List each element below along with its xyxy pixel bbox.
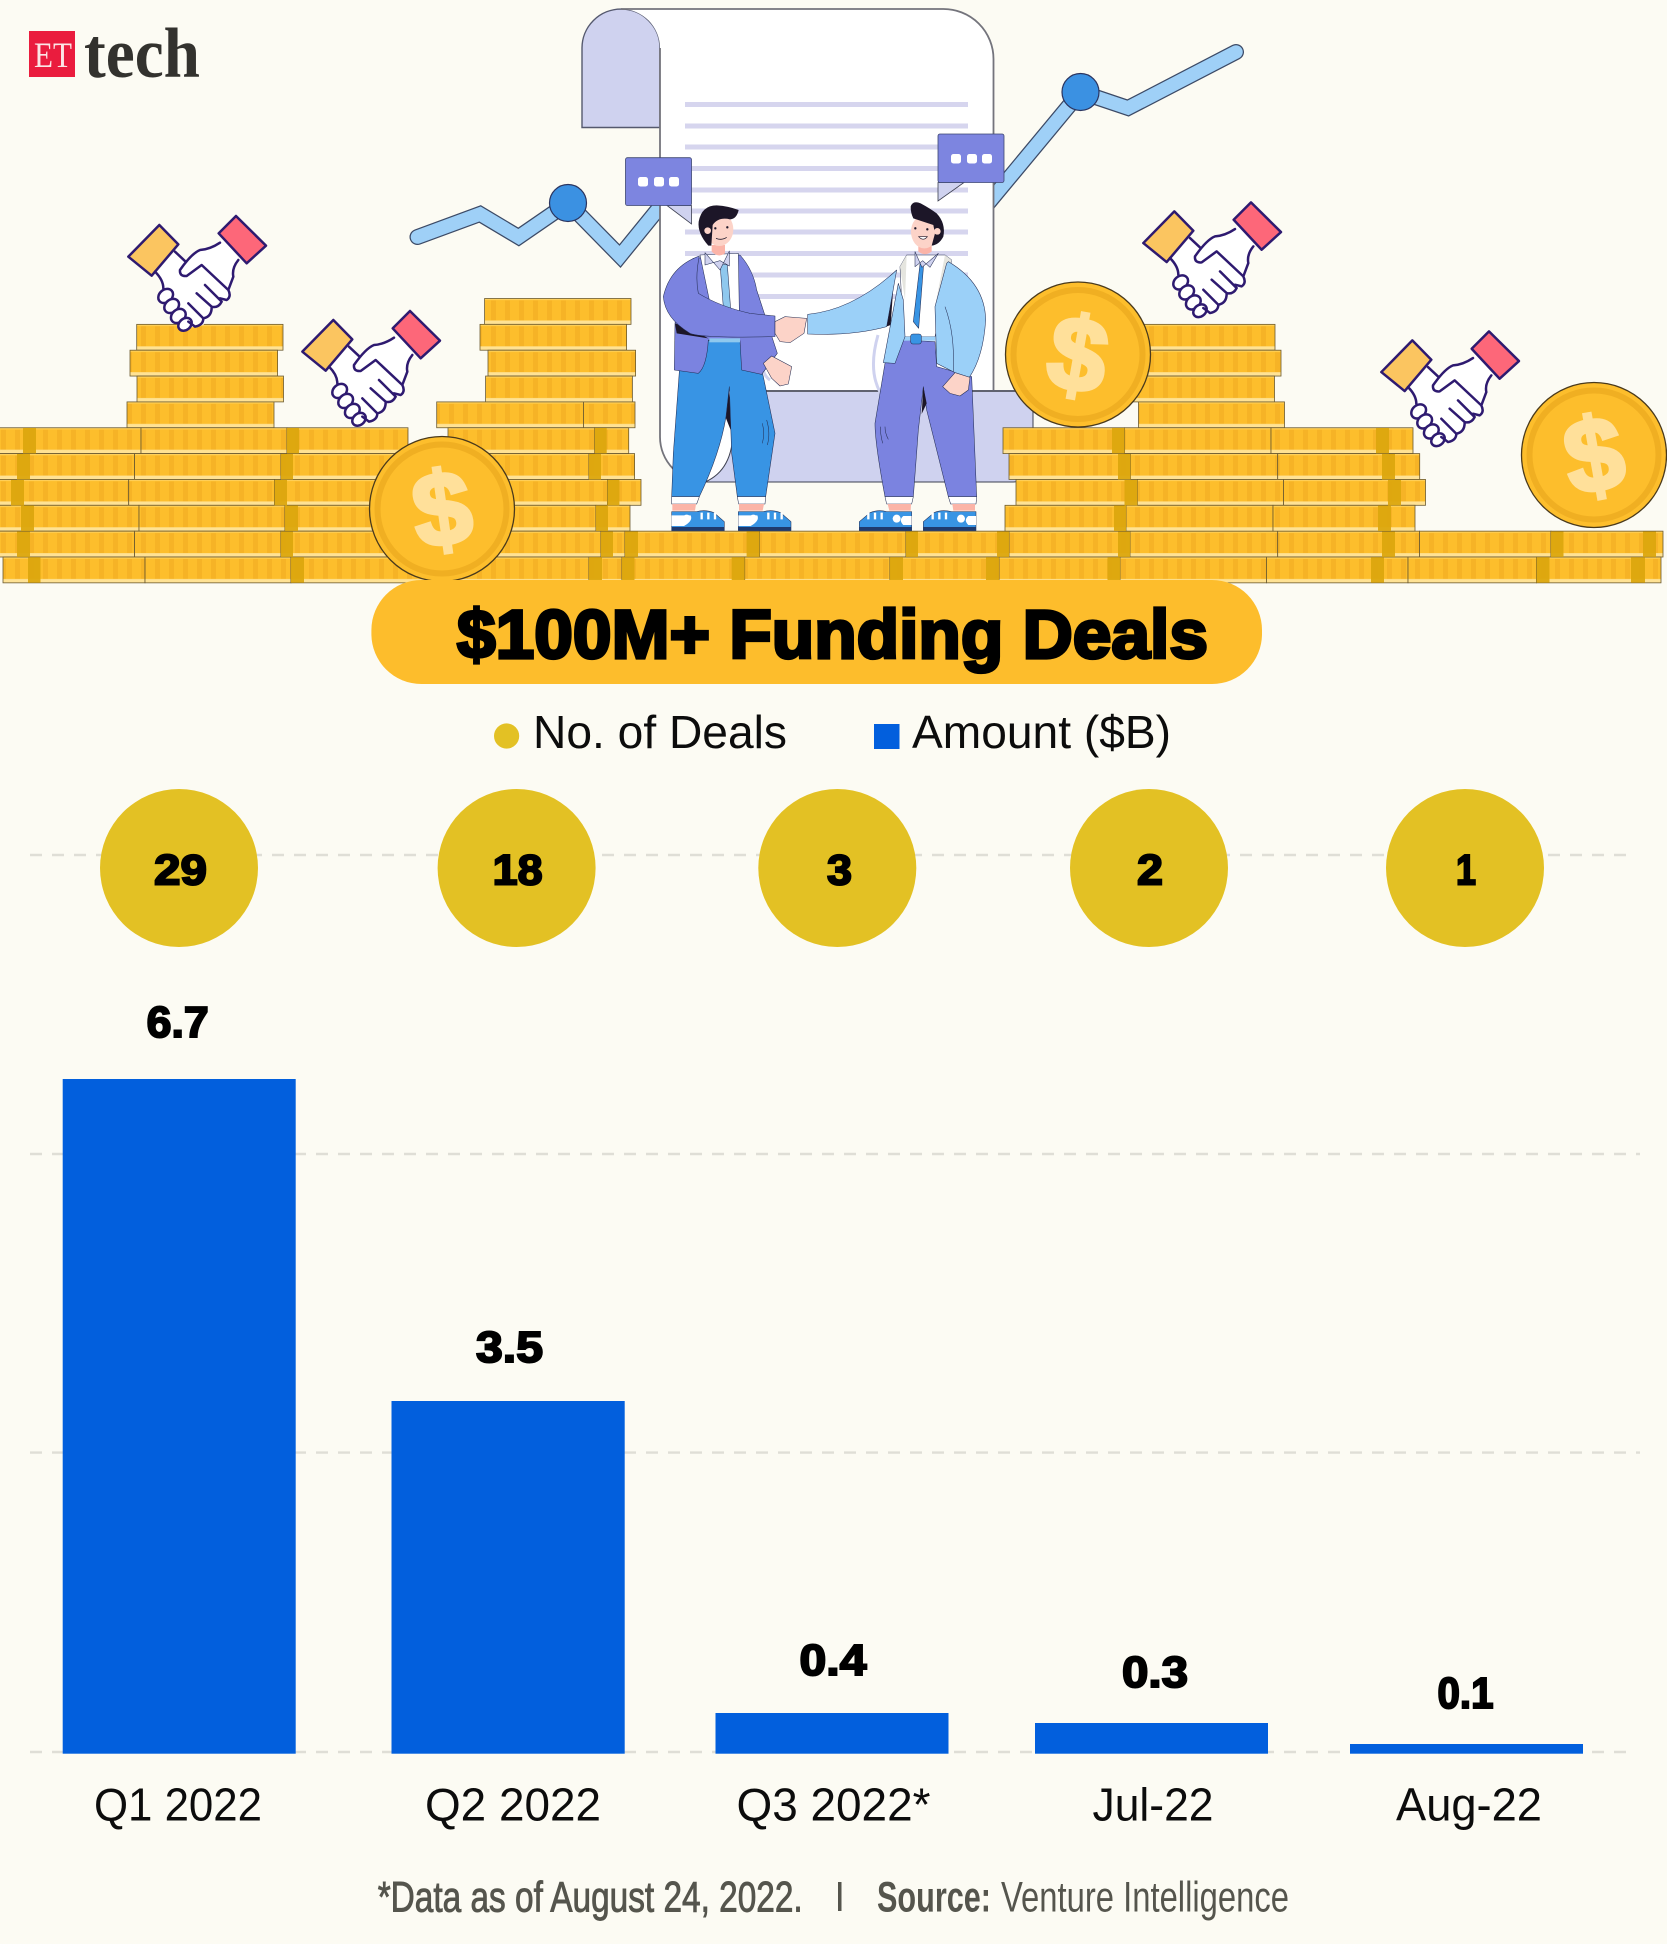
icon: handshake 4 xyxy=(1381,331,1519,449)
middle coin stack and ground row xyxy=(437,298,1663,583)
icon: handshake 2 xyxy=(302,311,440,428)
title pill: $100M+ Funding Deals xyxy=(457,596,1208,673)
logo: ET tech xyxy=(29,15,200,93)
bubble: 29 deals: 29 xyxy=(154,846,207,894)
trend line: right xyxy=(985,52,1236,207)
trend line: left xyxy=(418,197,668,256)
bubble: 18 deals xyxy=(438,789,596,947)
dollar coin: left xyxy=(370,436,514,582)
footnote and source xyxy=(378,1874,1289,1922)
legend: amount: Amount ($B) xyxy=(912,706,1171,758)
dollar coin: left: $ xyxy=(405,449,479,571)
bar: Q1 2022: 6.7 xyxy=(147,998,209,1047)
bubble: 18 deals: 18 xyxy=(493,846,543,894)
bar: Q3 2022: Q3 2022* xyxy=(736,1778,931,1830)
bar: Jul-22: Jul-22 xyxy=(1092,1778,1214,1830)
bar: Q1 2022: Q1 2022 xyxy=(94,1778,262,1830)
logo: ET tech: ET xyxy=(34,35,72,75)
figures: two businessmen shaking hands xyxy=(663,202,986,531)
icon: handshake 3 xyxy=(1143,202,1281,320)
bar: Q2 2022: Q2 2022 xyxy=(425,1778,601,1830)
bar chart xyxy=(63,998,1583,1830)
gridlines xyxy=(30,855,1640,1752)
document scroll xyxy=(582,9,1033,482)
footnote and source: *Data as of August 24, 2022. xyxy=(378,1874,803,1922)
bubble: 3 deals: 3 xyxy=(827,846,852,894)
figure: left man xyxy=(663,205,807,531)
speech bubble: right xyxy=(938,134,1004,201)
bubble: 29 deals xyxy=(100,789,258,947)
figure: right man xyxy=(808,202,986,531)
bar: Q2 2022 xyxy=(392,1323,625,1830)
title pill xyxy=(371,580,1262,684)
bar: Q3 2022 xyxy=(716,1636,948,1830)
bar: Q2 2022: 3.5 xyxy=(476,1323,543,1372)
bubble: 3 deals xyxy=(758,789,916,947)
icon: handshake 1 xyxy=(128,216,266,333)
bar: Q1 2022 xyxy=(63,998,296,1830)
dollar coin: middle right xyxy=(1006,282,1150,427)
bar: Q3 2022: 0.4 xyxy=(800,1636,867,1685)
deal count bubbles xyxy=(100,789,1544,947)
bar: Jul-22 xyxy=(1035,1648,1268,1830)
dollar coin: far right: $ xyxy=(1556,394,1633,518)
bubble: 1 deal: 1 xyxy=(1456,846,1476,894)
speech bubble: left xyxy=(626,158,692,224)
footnote and source: Venture Intelligence xyxy=(1001,1874,1289,1922)
dollar coin: far right xyxy=(1522,382,1666,528)
footnote and source: Source: xyxy=(877,1874,991,1922)
legend: no. of deals: No. of Deals xyxy=(533,706,787,758)
node: left trend point xyxy=(550,184,586,222)
logo: ET tech: tech xyxy=(84,15,200,93)
bubble: 2 deals: 2 xyxy=(1137,846,1163,894)
coin stacks xyxy=(0,298,1663,583)
handshake icons xyxy=(128,202,1519,449)
bubble: 2 deals xyxy=(1070,789,1228,947)
bar: Jul-22: 0.3 xyxy=(1122,1648,1188,1697)
bubble: 1 deal xyxy=(1386,789,1544,947)
dollar coin: middle right: $ xyxy=(1039,293,1116,418)
left coin stack xyxy=(0,324,445,583)
bar: Aug-22 xyxy=(1350,1669,1583,1830)
bar: Aug-22: Aug-22 xyxy=(1396,1778,1542,1830)
bar: Aug-22: 0.1 xyxy=(1438,1669,1494,1718)
node: right trend point xyxy=(1062,74,1099,110)
legend xyxy=(494,706,1171,758)
right coin stack xyxy=(1003,324,1426,531)
